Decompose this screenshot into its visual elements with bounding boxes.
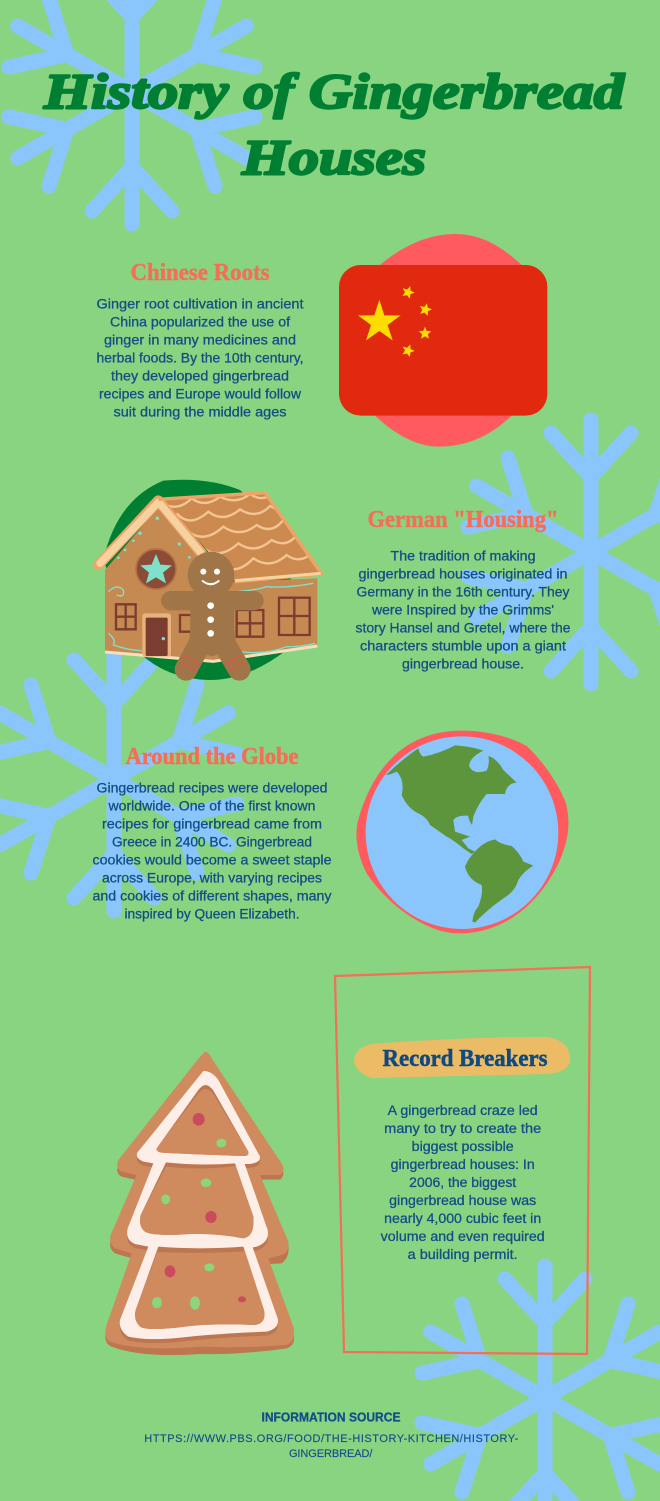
heading: german housing: German "Housing"	[368, 507, 558, 533]
text block: german housing: Germany in the 16th century. They	[356, 585, 570, 600]
text block: german housing: story Hansel and Gretel, where the	[356, 621, 570, 636]
panel: record breakers	[105, 967, 590, 1355]
text block: record breakers: biggest possible	[412, 1139, 514, 1154]
text block: around the globe: Greece in 2400 BC. Gingerbread	[112, 834, 312, 850]
panel: information source	[144, 1410, 519, 1460]
text block: record breakers: nearly 4,000 cubic feet in	[384, 1211, 541, 1226]
icon: globe	[356, 731, 568, 933]
panel: around the globe	[92, 731, 568, 933]
snowflake: bottom right	[411, 1266, 660, 1501]
text block: source url	[144, 1433, 519, 1460]
text block: source url: GINGERBREAD/	[289, 1448, 373, 1460]
text block: chinese roots: ginger in many medicines and	[104, 332, 296, 348]
heading: chinese roots: Chinese Roots	[130, 260, 270, 286]
text block: around the globe: worldwide. One of the first known	[107, 798, 316, 814]
illustration: gingerbread tree cookie	[105, 1052, 294, 1355]
text block: chinese roots: herbal foods. By the 10th century,	[96, 350, 304, 366]
text block: german housing: characters stumble upon a giant	[360, 639, 566, 654]
text block: record breakers: gingerbread house was	[389, 1193, 536, 1208]
frame: hand drawn box	[335, 967, 590, 1354]
heading: information source: INFORMATION SOURCE	[262, 1410, 400, 1424]
text block: record breakers: 2006, the biggest	[409, 1175, 516, 1190]
snowflake: middle left	[0, 647, 248, 911]
snowflake: top left	[0, 0, 266, 224]
text block: around the globe: recipes for gingerbread came from	[102, 816, 322, 832]
title	[43, 63, 625, 185]
title: Houses	[241, 129, 426, 185]
text block: record breakers: A gingerbread craze led	[388, 1103, 538, 1118]
text block: around the globe	[92, 780, 332, 922]
title: History of Gingerbread	[43, 63, 625, 119]
text block: around the globe: cookies would become a sweet staple	[92, 852, 332, 868]
text block: source url: HTTPS://WWW.PBS.ORG/FOOD/THE-HISTORY-KITCHEN/HISTORY-	[144, 1433, 519, 1445]
text block: german housing: The tradition of making	[390, 549, 536, 564]
text block: german housing: gingerbread houses originated in	[358, 567, 568, 582]
text block: chinese roots: suit during the middle ages	[114, 404, 287, 420]
text block: around the globe: across Europe, with varying recipes	[102, 870, 322, 886]
text block: record breakers: volume and even required	[381, 1229, 545, 1244]
text block: chinese roots: recipes and Europe would follow	[99, 386, 301, 402]
text block: german housing: gingerbread house.	[402, 657, 524, 672]
text block: chinese roots: Ginger root cultivation in ancient	[96, 296, 304, 312]
text block: chinese roots: China popularized the use of	[110, 314, 290, 330]
text block: record breakers: gingerbread houses: In	[391, 1157, 535, 1172]
heading pill: record breakers	[354, 1037, 570, 1078]
panel: german housing	[98, 480, 570, 680]
text block: around the globe: and cookies of different shapes, many	[92, 888, 332, 904]
panel: chinese roots	[96, 234, 547, 447]
text block: german housing: were Inspired by the Grimms'	[371, 603, 554, 618]
text block: record breakers: many to try to create the	[384, 1121, 541, 1136]
illustration: gingerbread house with gingerbread man	[98, 480, 322, 680]
text block: around the globe: inspired by Queen Elizabeth.	[124, 906, 300, 922]
snowflake: right	[457, 420, 660, 684]
text block: record breakers	[381, 1103, 545, 1262]
text block: chinese roots	[96, 296, 304, 420]
gingerbread man	[171, 552, 254, 672]
heading pill: record breakers: Record Breakers	[382, 1046, 548, 1072]
text block: record breakers: a building permit.	[408, 1247, 518, 1262]
text block: around the globe: Gingerbread recipes were developed	[96, 780, 328, 796]
icon: china flag	[339, 234, 547, 447]
text block: chinese roots: they developed gingerbread	[111, 368, 289, 384]
text block: german housing	[356, 549, 570, 672]
heading: around the globe: Around the Globe	[126, 744, 299, 770]
